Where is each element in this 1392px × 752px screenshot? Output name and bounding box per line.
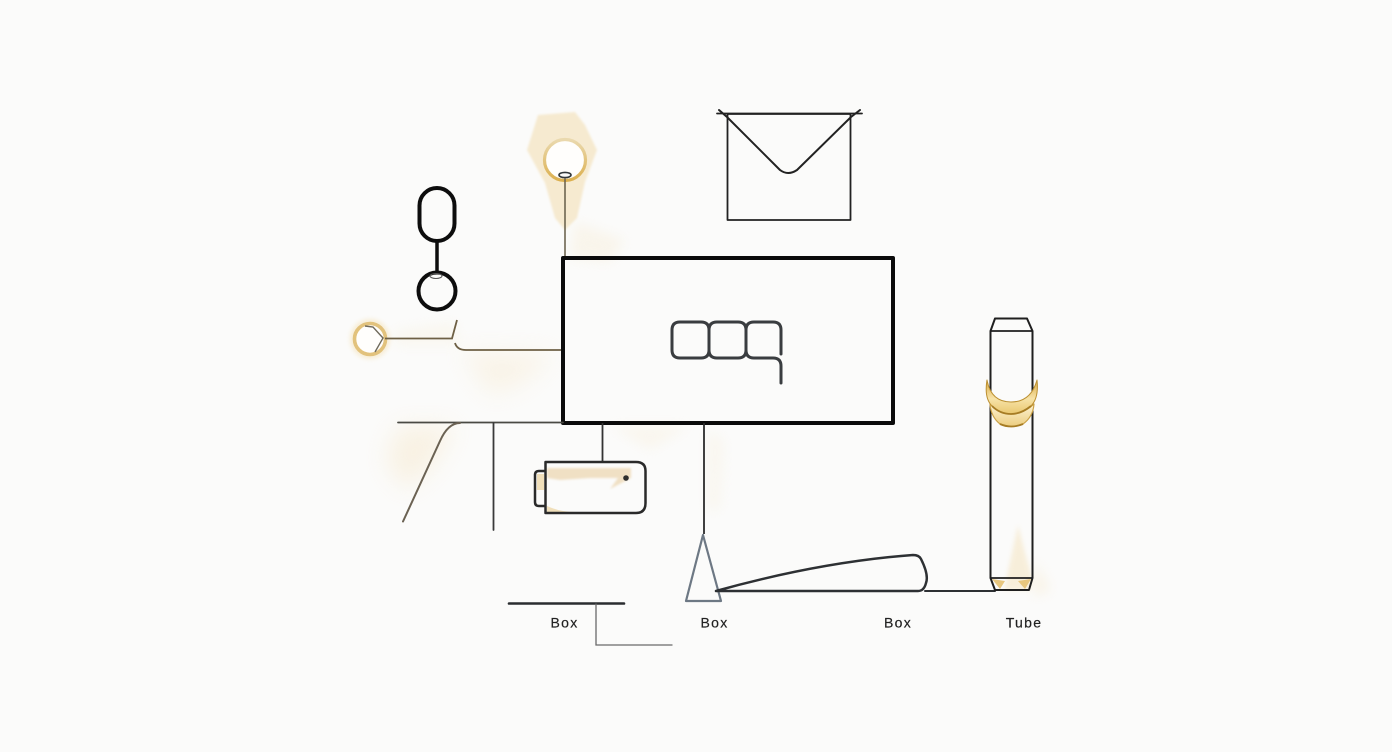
- shelf with elbow connector: [509, 604, 672, 645]
- label: Box: Box: [700, 614, 729, 630]
- label: Box: Box: [884, 614, 912, 630]
- icon: gold ring pin: [527, 112, 597, 258]
- label: Box: Box: [550, 614, 579, 630]
- icon: tube with gold rings: [986, 318, 1037, 590]
- left connector tree: [398, 422, 563, 530]
- upper ring: [986, 380, 1037, 414]
- icon: envelope: [717, 110, 862, 220]
- icon: triangle on stem: [686, 423, 721, 601]
- label: Tube: Tube: [1006, 614, 1042, 630]
- icon: wedge with baseline: [716, 555, 995, 591]
- icon: capsule and circle: [418, 188, 456, 310]
- main box: [563, 258, 893, 423]
- icon: battery box: [535, 423, 646, 513]
- soft background glows: [385, 222, 1050, 596]
- lower ring: [990, 404, 1034, 426]
- icon: gold ring node with connector: [350, 319, 562, 359]
- icon: linked rounded squares inside main box: [672, 322, 781, 383]
